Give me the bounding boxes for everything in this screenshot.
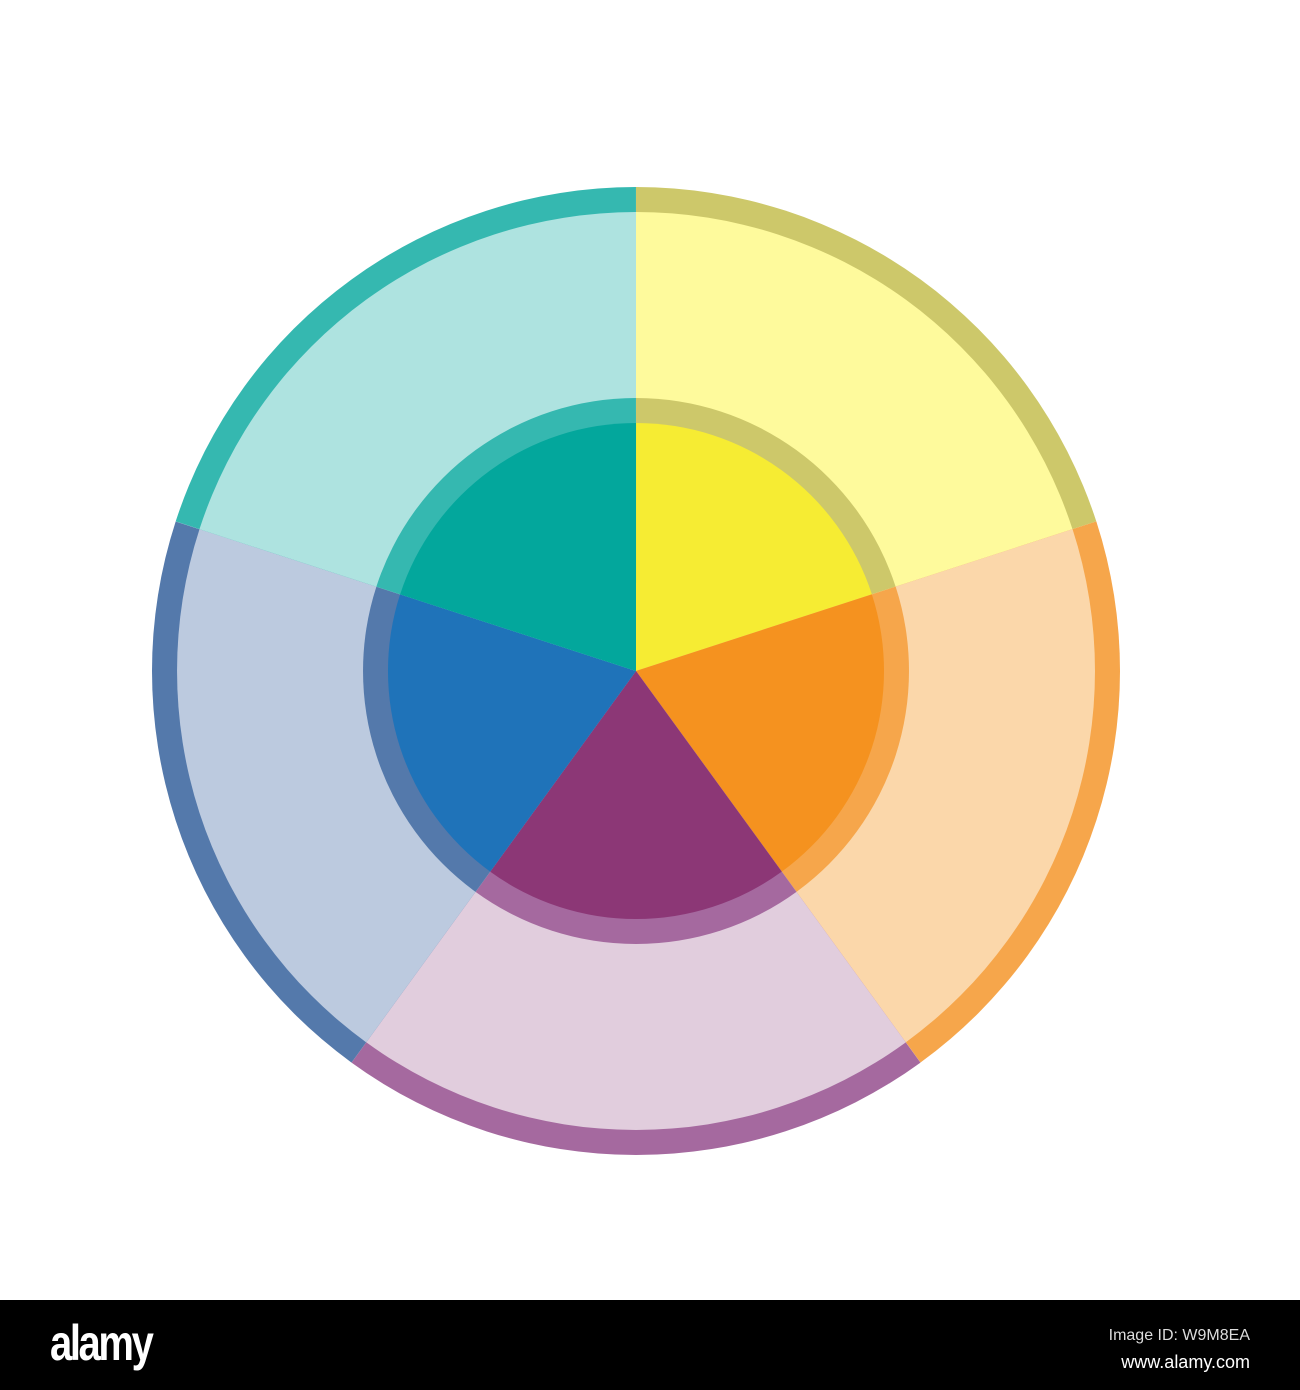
footer bar	[0, 1300, 1300, 1390]
segment: purple	[264, 671, 920, 1333]
footer image id: www.alamy.com	[1121, 1352, 1250, 1372]
footer logo: alamy	[50, 1315, 151, 1371]
footer image id: Image ID: W9M8EA	[1109, 1327, 1250, 1344]
segment: teal	[176, 84, 778, 671]
segment: blue	[0, 400, 636, 1063]
segment: orange	[636, 521, 1239, 1109]
footer image id	[1109, 1327, 1250, 1372]
segment: yellow	[636, 187, 1096, 671]
